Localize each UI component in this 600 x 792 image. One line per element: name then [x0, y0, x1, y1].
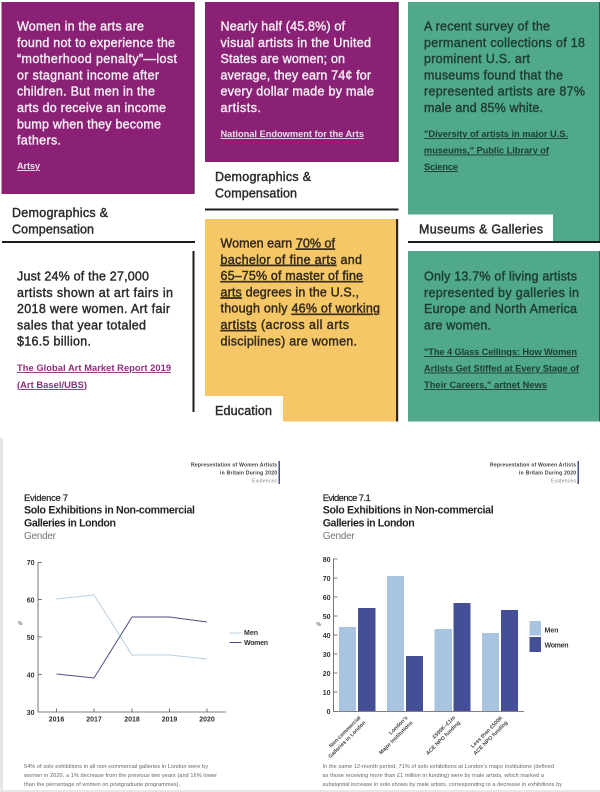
- panel: motherhood penalty: [2, 2, 195, 194]
- text: motherhood penalty: fathers.: [17, 134, 61, 148]
- chart title: Galleries in London: [24, 517, 116, 529]
- running header: Representation of Women Artists: [191, 463, 277, 469]
- text: motherhood penalty: children. But men in the: [17, 85, 155, 99]
- text: motherhood penalty: arts do receive an income: [17, 101, 166, 115]
- source: Public Library of Science: Science: [424, 162, 458, 172]
- bar chart: [317, 557, 568, 760]
- chart title: Gender: [24, 531, 57, 542]
- bars: 500K to 1m funding: [434, 603, 470, 711]
- year labels: 2019: [162, 716, 177, 724]
- chart title: [24, 492, 195, 542]
- text: visual artists pay: States are women; on: [220, 52, 345, 66]
- source: artnet News: [424, 347, 580, 390]
- year labels: [49, 716, 215, 724]
- year labels: 2018: [124, 716, 140, 724]
- axis labels: 40: [27, 672, 35, 680]
- text: motherhood penalty: bump when they become: [17, 117, 161, 131]
- tab: Education label: Education: [215, 404, 272, 418]
- chart title: Evidence 7: [24, 492, 68, 503]
- heading: Demographics and Compensation (left): [12, 206, 109, 236]
- text: education degrees: 65–75% of master of fine: [220, 269, 363, 283]
- text: art fairs: sales that year totaled: [17, 318, 146, 332]
- text: museum survey: [424, 20, 585, 115]
- category labels: London's: [388, 715, 409, 736]
- text: art fairs: Just 24% of the 27,000: [17, 270, 149, 284]
- tab: Museums and Galleries label: Museums & Galleries: [419, 222, 543, 236]
- text: museum survey: male and 85% white.: [424, 101, 543, 115]
- category labels: ACE NPO funding: [425, 720, 462, 757]
- text: education degrees: bachelor of fine arts and: [220, 253, 362, 267]
- axis labels: 30: [323, 652, 331, 659]
- source: Global Art Market Report: (Art Basel/UBS): [17, 380, 87, 390]
- running header: Evidences: [551, 478, 576, 484]
- source: artnet News: Artists Get Stiffed at Every Stage of: [424, 364, 580, 374]
- category labels: Galleries in London: [328, 720, 367, 760]
- text: galleries: [424, 270, 579, 332]
- text: museum survey: A recent survey of the: [424, 20, 550, 34]
- legend: Men: [544, 628, 558, 634]
- text: education degrees: though only 46% of working: [220, 302, 380, 316]
- source: artnet News: "The 4 Glass Ceilings: How Women: [424, 347, 577, 357]
- text: art fairs: 2018 were women. Art fair: [17, 302, 170, 316]
- text: motherhood penalty: [17, 20, 178, 148]
- bars: non-commercial galleries: [339, 608, 376, 711]
- panel: museum collections survey: [408, 2, 600, 242]
- running header: Representation of Women Artists: [490, 463, 576, 469]
- source: Artsy: Artsy: [17, 161, 41, 171]
- text: visual artists pay: every dollar made by male: [220, 85, 374, 99]
- source: National Endowment for the Arts: National Endowment for the Arts: [220, 129, 364, 139]
- chart title: Evidence 7.1: [323, 492, 371, 503]
- text: museum survey: represented artists are 87%: [424, 85, 585, 99]
- tab: Museums and Galleries label: [408, 214, 553, 242]
- text: visual artists pay: Nearly half (45.8%) of: [220, 20, 346, 34]
- chart title: Solo Exhibitions in Non-commercial: [24, 504, 195, 516]
- source: Global Art Market Report: [17, 363, 171, 390]
- heading: Demographics and Compensation (center): [215, 170, 312, 200]
- category labels: Non-commercial: [328, 715, 363, 749]
- text: galleries: are women.: [424, 318, 491, 332]
- axis labels: 50: [323, 614, 331, 621]
- series: women: [56, 617, 207, 678]
- text: visual artists pay: average, they earn 74¢ for: [220, 68, 371, 82]
- caption: In the same 12-month period, 71% of solo exhibitions at London's major institutions (defined: [322, 764, 554, 770]
- heading: Demographics and Compensation (center): Demographics &: [215, 170, 312, 184]
- panel: education: [205, 219, 398, 422]
- running header: Evidences: [252, 478, 278, 484]
- chart title: Solo Exhibitions in Non-commercial: [323, 504, 494, 516]
- year labels: 2016: [49, 716, 64, 724]
- caption: substantial increase in solo shows by male artists, corresponding to a decrease in exhibitions by: [322, 782, 562, 788]
- category labels: Major Institutions: [378, 720, 414, 756]
- text: visual artists pay: [220, 20, 374, 115]
- running header: [490, 461, 579, 484]
- legend: Women: [544, 642, 568, 650]
- report page: Evidence 7.1: [317, 461, 579, 788]
- caption: [322, 764, 562, 788]
- chart title: Galleries in London: [323, 517, 415, 529]
- text: museum survey: museums found that the: [424, 68, 563, 82]
- caption: [23, 764, 217, 788]
- chart title: [323, 492, 494, 542]
- line chart: [18, 560, 268, 724]
- category labels: £500K–£1m: [432, 715, 457, 740]
- legend: [230, 630, 268, 647]
- text: museum survey: permanent collections of 18: [424, 36, 585, 50]
- heading: Demographics and Compensation (center): Compensation: [215, 186, 297, 200]
- source: Public Library of Science: "Diversity of artists in major U.S.: [424, 129, 568, 139]
- category labels: Less than £500K: [470, 715, 504, 749]
- axis labels: 70: [323, 576, 331, 583]
- caption: women in 2020, a 1% decrease from the previous two years (and 16% lower: [23, 773, 217, 779]
- source: artnet News: Their Careers," artnet News: [424, 380, 547, 390]
- year labels: 2020: [199, 716, 215, 724]
- category labels: ACE NPO funding: [473, 720, 509, 757]
- text: galleries: Europe and North America: [424, 302, 577, 316]
- caption: than the percentage of women on postgraduate programmes).: [24, 782, 180, 788]
- heading: Demographics and Compensation (left): Demographics &: [12, 206, 109, 220]
- axis labels: 80: [323, 557, 331, 564]
- axis labels: 60: [27, 598, 35, 604]
- text: galleries: Only 13.7% of living artists: [424, 270, 577, 284]
- tab: Education label: [205, 396, 283, 422]
- text: motherhood penalty: found not to experience the: [17, 36, 175, 50]
- year labels: 2017: [86, 716, 102, 724]
- axis labels: 60: [323, 595, 331, 602]
- category labels: [323, 715, 509, 760]
- text: art fairs: artists shown at art fairs in: [17, 286, 173, 300]
- report page: Evidence 7: [18, 461, 280, 788]
- text: motherhood penalty: “motherhood penalty”—lost: [17, 52, 178, 66]
- axis labels: 40: [323, 633, 331, 640]
- series: men: [56, 595, 207, 659]
- axis labels: 0: [327, 709, 331, 716]
- legend: Women: [244, 640, 268, 647]
- text: education degrees: disciplines) are women.: [220, 334, 357, 348]
- panel: living artists in galleries: [408, 251, 600, 422]
- text: motherhood penalty: or stagnant income after: [17, 68, 159, 82]
- axis labels: 30: [27, 710, 35, 717]
- text: art fairs: $16.5 billion.: [17, 335, 91, 349]
- axis labels: 70: [27, 560, 35, 567]
- panel: visual artists pay: [205, 2, 399, 162]
- axis labels: 20: [323, 671, 331, 678]
- text: education degrees: Women earn 70% of: [220, 236, 336, 250]
- text: visual artists pay: visual artists in the United: [220, 36, 371, 50]
- running header: [191, 461, 280, 484]
- axis labels: [317, 557, 331, 716]
- caption: as those receiving more than £1 million in funding) were by male artists, which marked a: [322, 773, 545, 779]
- text: visual artists pay: artists.: [220, 101, 261, 115]
- axis labels: 10: [323, 690, 331, 697]
- text: education degrees: artists (across all arts: [220, 318, 349, 332]
- text: motherhood penalty: Women in the arts are: [17, 20, 144, 34]
- text: education degrees: arts degrees in the U.S.,: [220, 285, 359, 299]
- axis labels: %: [18, 621, 23, 627]
- text: art fairs: [17, 270, 173, 349]
- running header: in Britain During 2020: [519, 470, 576, 476]
- chart title: Gender: [323, 531, 355, 542]
- text: museum survey: prominent U.S. art: [424, 52, 531, 66]
- bars: less than 500K funding: [482, 610, 518, 711]
- panel: art fairs: [17, 270, 173, 390]
- legend: [530, 621, 568, 652]
- legend: Men: [244, 630, 258, 637]
- axis labels: 50: [27, 635, 35, 642]
- source: Public Library of Science: [424, 129, 568, 172]
- caption: 54% of solo exhibitions in all non-commercial galleries in London were by: [24, 764, 208, 770]
- source: Global Art Market Report: The Global Art Market Report 2019: [17, 363, 171, 373]
- running header: in Britain During 2020: [220, 470, 277, 476]
- heading: Demographics and Compensation (left): Compensation: [12, 222, 94, 236]
- text: education degrees: [220, 236, 380, 348]
- bars: major institutions: [387, 576, 423, 711]
- axis labels: %: [317, 622, 322, 628]
- source: Public Library of Science: museums," Public Library of: [424, 146, 550, 156]
- text: galleries: represented by galleries in: [424, 286, 579, 300]
- axis labels: [18, 560, 35, 717]
